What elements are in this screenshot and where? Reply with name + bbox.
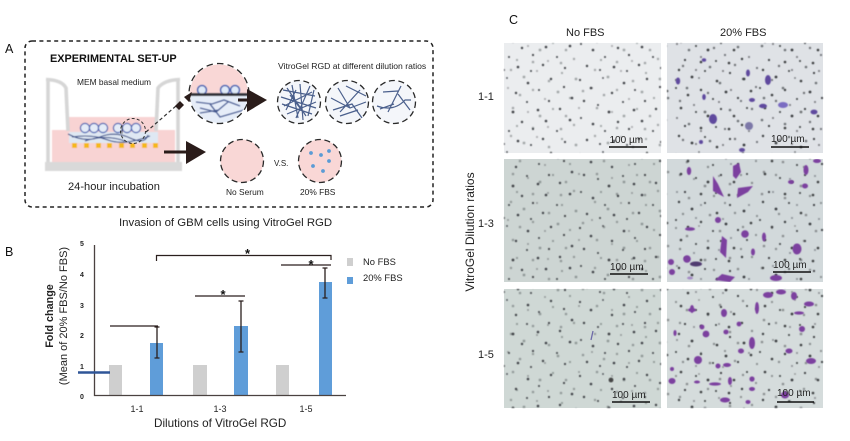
label: v.s.: V.S. [274, 159, 288, 168]
dashed zoom arrow [146, 92, 192, 132]
bars: 20% FBS [150, 282, 332, 395]
arrow to gel dilutions [238, 89, 267, 112]
error bars [154, 268, 328, 358]
gel circle: 1-5 sparse [372, 80, 416, 124]
y axis ticks: 4 [80, 272, 84, 279]
heading: experimental set-up: EXPERIMENTAL SET-UP [50, 53, 177, 65]
significance stars [220, 246, 314, 302]
y axis ticks: 5 [80, 241, 84, 248]
panel: experimental set-up [25, 41, 433, 207]
gel circle: 1-3 medium [326, 80, 368, 124]
panel label B: B [5, 245, 13, 259]
legend: 20% FBS [363, 272, 403, 283]
gel circle: 1-1 dense [278, 80, 320, 124]
gel fibres [68, 134, 150, 142]
column heading: No FBS: No FBS [566, 27, 605, 39]
x axis categories: 1-3 [213, 404, 227, 414]
circle: 20% FBS [298, 140, 342, 197]
column heading: 20% FBS: 20% FBS [720, 27, 766, 39]
zoomed cells [198, 86, 239, 94]
arrow to serum conditions [164, 141, 206, 164]
row axis title: VitroGel Dilution ratios [463, 172, 477, 292]
pink medium upper [69, 117, 156, 137]
micrograph: 1-3 20% FBS: 100 µm [773, 260, 807, 271]
panel label C: C [509, 13, 518, 27]
cells [80, 123, 141, 133]
axes [94, 245, 346, 396]
bars: no FBS [109, 365, 289, 395]
panel label A: A [5, 42, 14, 56]
y axis ticks: 0 [80, 394, 84, 401]
baseline marker [78, 371, 110, 374]
x axis categories: 1-5 [299, 404, 313, 414]
dashed frame [25, 41, 433, 207]
row label 1-3: 1-3 [478, 218, 494, 230]
significance stars: * [220, 287, 226, 302]
significance stars: * [245, 246, 251, 261]
micrograph: 1-5 20% FBS [667, 289, 823, 408]
panel: bar chart [44, 241, 403, 430]
micrograph: 1-1 no FBS: 100 µm [610, 135, 643, 146]
micrograph: 1-1 no FBS [504, 43, 661, 153]
label: MEM basal medium: MEM basal medium [77, 77, 151, 87]
zoomed membrane [188, 93, 250, 96]
zoomed fibres [196, 100, 244, 117]
legend: No FBS [363, 256, 396, 267]
x axis categories [130, 404, 313, 414]
y axis title: (Mean of 20% FBS/No FBS) [58, 247, 70, 385]
row label 1-5: 1-5 [478, 349, 494, 361]
row label 1-1: 1-1 [478, 91, 494, 103]
x axis title: Dilutions of VitroGel RGD [154, 417, 286, 430]
y axis ticks: 3 [80, 303, 84, 310]
micrograph: 1-5 no FBS [504, 289, 661, 408]
legend [347, 256, 403, 284]
diagram: culture well [45, 80, 182, 171]
micrograph: 1-1 20% FBS: 100 µm [771, 134, 805, 145]
micrograph: 1-5 no FBS: 100 µm [612, 390, 646, 401]
significance brackets [110, 256, 331, 326]
small dashed zoom circle [120, 118, 146, 144]
micrograph: 1-3 no FBS: 100 µm [610, 262, 644, 273]
micrograph: 1-1 20% FBS [667, 43, 823, 153]
y axis ticks [80, 241, 84, 401]
gel layer [69, 132, 158, 143]
zoomed gel circle [188, 64, 250, 124]
pink medium lower [52, 130, 175, 163]
label: 24-hour incubation: 24-hour incubation [68, 181, 160, 193]
circle: 20% FBS: 20% FBS [300, 187, 336, 197]
y axis title: Fold change [44, 284, 56, 348]
yellow pores [72, 143, 158, 148]
marker [121, 125, 123, 134]
well walls and base [46, 80, 180, 163]
y axis title [44, 247, 70, 385]
y axis ticks: 1 [80, 364, 84, 371]
circle: no serum [220, 140, 264, 197]
significance stars: * [308, 257, 314, 272]
micrograph: 1-5 20% FBS: 100 µm [777, 388, 811, 399]
micrograph: 1-3 20% FBS [667, 159, 823, 282]
caption: invasion of GBM cells: Invasion of GBM cells using VitroGel RGD [119, 217, 332, 229]
label: VitroGel RGD at different dilution ratios: VitroGel RGD at different dilution ratios [278, 61, 426, 71]
circle: no serum: No Serum [226, 187, 264, 197]
micrograph: 1-3 no FBS [504, 159, 661, 282]
y axis ticks: 2 [80, 333, 84, 340]
x axis categories: 1-1 [130, 404, 144, 414]
